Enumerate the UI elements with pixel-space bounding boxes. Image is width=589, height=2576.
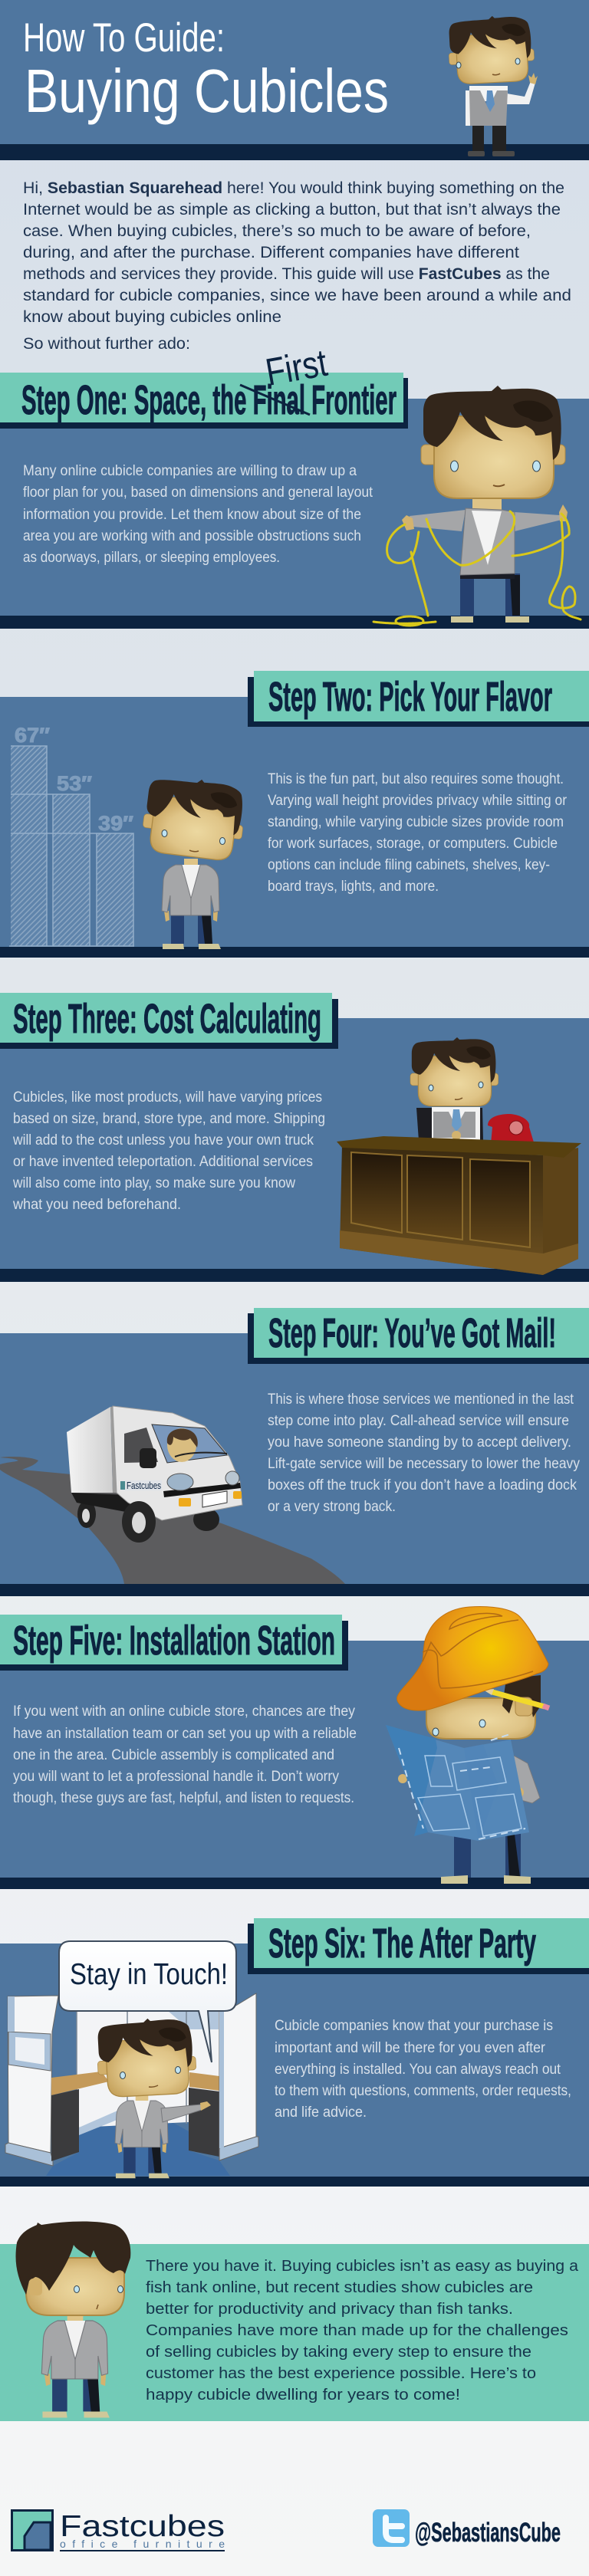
icon: hard hat	[397, 1606, 548, 1710]
conclusion text: Companies have more than made up for the challenges	[146, 2322, 568, 2339]
step six text: and life advice.	[275, 2104, 367, 2121]
step four text: you have someone standing by to accept delivery.	[268, 1434, 571, 1451]
conclusion text: happy cubicle dwelling for years to come!	[146, 2387, 460, 2404]
blueprint	[386, 1725, 529, 1841]
step three text: what you need beforehand.	[12, 1197, 181, 1213]
step five text	[13, 1704, 357, 1806]
logo: Fastcubes	[12, 2510, 225, 2551]
character: looking sideways	[15, 2222, 130, 2418]
icon: red phone	[488, 1114, 534, 1147]
logo: Fastcubes: Fastcubes	[60, 2510, 225, 2543]
speech bubble	[59, 1941, 236, 2062]
intro text: standard for cubicle companies, since we have been around a while and	[23, 287, 571, 304]
step six text: everything is installed. You can always reach out	[275, 2062, 561, 2078]
title line two: Buying Cubicles	[25, 57, 389, 125]
step one text: floor plan for you, based on dimensions and general layout	[23, 485, 373, 501]
delivery truck: Fastcubes	[127, 1480, 161, 1491]
panel: step two	[0, 671, 589, 958]
step one text: Many online cubicle companies are willing to draw up a	[23, 463, 357, 479]
step three text: will add to the cost unless you have your own truck	[12, 1132, 314, 1148]
conclusion text	[146, 2258, 579, 2404]
step two text: options can include filing cabinets, shelves, key-	[268, 857, 550, 873]
speech bubble: Stay in Touch!	[70, 1958, 228, 1991]
step six text: Cubicle companies know that your purchase is	[275, 2018, 553, 2034]
step three text: based on size, brand, store type, and more. Shipping	[13, 1111, 325, 1127]
panel: step three	[0, 993, 589, 1282]
chart: cubicle wall heights	[9, 724, 134, 946]
step five text: have an installation team or can set you up with a reliable	[13, 1726, 357, 1742]
intro text: So without further ado:	[23, 335, 190, 353]
step two text: Varying wall height provides privacy while sitting or	[268, 793, 568, 809]
step three text: or have invented teleportation. Additional services	[13, 1154, 313, 1170]
intro text: case. When buying cubicles, there’s so much to be aware of before,	[23, 222, 531, 240]
panel: step one	[0, 341, 589, 629]
step five heading	[0, 1615, 348, 1671]
intro text	[23, 179, 571, 353]
chart: cubicle wall heights: 67″	[15, 724, 50, 747]
intro text: during, and after the purchase. Different companies have different	[23, 244, 519, 261]
step three heading	[0, 993, 338, 1049]
step three text	[12, 1089, 325, 1213]
panel: step six	[0, 1918, 589, 2187]
cubicle	[5, 1993, 258, 2176]
step five text: you will want to let a professional handle it. Don’t worry	[13, 1769, 339, 1785]
conclusion text: better for productivity and privacy than fish tanks.	[146, 2301, 513, 2318]
step one text: as doorways, pillars, or sleeping employees.	[23, 550, 280, 566]
step five heading: Step Five: Installation Station	[13, 1618, 335, 1664]
step two text	[268, 771, 568, 895]
step three text: will also come into play, so make sure you know	[12, 1175, 295, 1191]
road	[0, 1457, 345, 1584]
conclusion text: of selling cubicles by taking every step to ensure the	[146, 2344, 531, 2361]
step one text: information you provide. Let them know about size of the	[23, 507, 361, 523]
step six text	[275, 2018, 571, 2121]
twitter handle	[373, 2509, 561, 2548]
character: hard hat reading blueprint	[386, 1606, 549, 1884]
character: gesturing	[95, 2016, 211, 2178]
chart: cubicle wall heights: 53″	[57, 772, 92, 795]
logo: Fastcubes: office furniture	[60, 2538, 225, 2550]
icon: pencil	[483, 1689, 549, 1708]
step four text: or a very strong back.	[268, 1499, 396, 1515]
step five text: one in the area. Cubicle assembly is complicated and	[13, 1747, 334, 1763]
step two text: for work surfaces, storage, or computers. Cubicle	[268, 836, 558, 852]
intro text: know about buying cubicles online	[23, 308, 281, 326]
step three heading: Step Three: Cost Calculating	[13, 996, 321, 1042]
conclusion text: customer has the best experience possible. Here’s to	[146, 2365, 536, 2382]
desk	[337, 1136, 581, 1275]
step two text: standing, while varying cubicle sizes provide room	[268, 814, 564, 830]
step one heading	[0, 341, 408, 429]
character at desk with red phone	[337, 1037, 581, 1275]
step five text: If you went with an online cubicle store, chances are they	[13, 1704, 355, 1720]
step four text: step come into play. Call-ahead service will ensure	[268, 1413, 569, 1429]
step three text: Cubicles, like most products, will have varying prices	[13, 1089, 322, 1106]
conclusion text: fish tank online, but recent studies show cubicles are	[146, 2279, 533, 2296]
character: waving in vest	[447, 14, 538, 156]
step five text: though, these guys are fast, helpful, and listen to requests.	[13, 1790, 354, 1806]
intro text: Internet would be as simple as clicking a button, but that isn’t always the	[23, 201, 561, 219]
title line one: How To Guide:	[23, 15, 225, 61]
step one text: area you are working with and possible obstructions such	[23, 528, 361, 544]
character: standing	[140, 773, 248, 949]
conclusion text: There you have it. Buying cubicles isn’t as easy as buying a	[146, 2258, 579, 2275]
intro text: Hi, Sebastian Squarehead here! You would think buying something on the	[23, 179, 564, 197]
step one text	[23, 463, 373, 566]
step one heading: First	[262, 341, 331, 394]
intro text: methods and services they provide. This guide will use FastCubes as the	[23, 265, 550, 283]
step six text: important and will be there for you even after	[275, 2040, 546, 2056]
character: tangled in measuring tape	[373, 386, 581, 626]
delivery truck	[67, 1406, 242, 1543]
panel: conclusion	[0, 2222, 589, 2421]
step four text: boxes off the truck if you don’t have a loading dock	[268, 1477, 577, 1493]
step four text	[268, 1392, 580, 1515]
chart: cubicle wall heights: 39″	[98, 812, 133, 835]
panel: step five	[0, 1606, 589, 1889]
icon: twitter bird badge	[373, 2509, 410, 2547]
step two text: board trays, lights, and more.	[268, 879, 439, 895]
panel: step four	[0, 1308, 589, 1596]
header banner	[0, 0, 589, 160]
